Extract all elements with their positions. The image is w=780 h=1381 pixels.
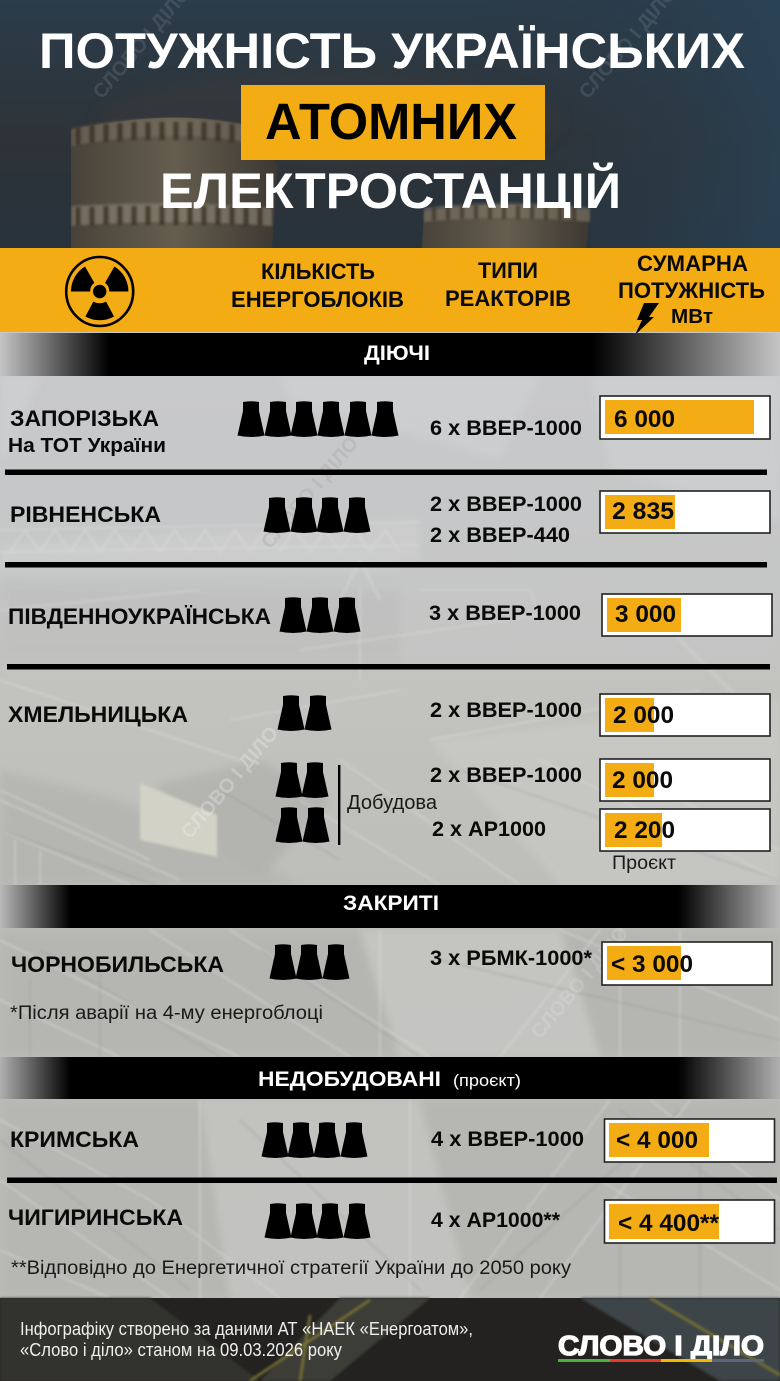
capacity bar: 3000: 3 000 bbox=[615, 601, 676, 628]
row: Pivdennoukrainska bbox=[8, 594, 772, 636]
background: plant site photo bbox=[0, 376, 780, 1298]
plant building bbox=[140, 783, 217, 857]
station name: ЗАПОРІЗЬКА bbox=[10, 406, 159, 431]
section band: unfinished: НЕДОБУДОВАНІ bbox=[258, 1068, 441, 1091]
icon: 6 cooling towers bbox=[238, 401, 398, 437]
column heading: reactor types: РЕАКТОРІВ bbox=[445, 286, 571, 311]
capacity bar: 2000 bbox=[600, 694, 770, 736]
reactor types bbox=[430, 493, 582, 547]
column heading: reactor types bbox=[445, 258, 571, 311]
row: Rivnenska bbox=[10, 491, 770, 547]
reactor types: 2 x ВВЕР-440 bbox=[430, 524, 570, 547]
column heading: total capacity: МВт bbox=[671, 306, 713, 328]
station name: РІВНЕНСЬКА bbox=[10, 502, 161, 527]
title highlight box bbox=[241, 85, 545, 160]
title bbox=[39, 23, 745, 219]
source text bbox=[20, 1319, 473, 1360]
title: ПОТУЖНІСТЬ УКРАЇНСЬКИХ bbox=[39, 23, 745, 79]
row: Chyhyrynska bbox=[8, 1200, 774, 1279]
column heading: units: КІЛЬКІСТЬ bbox=[261, 259, 375, 284]
capacity bar: 6000: 6 000 bbox=[614, 406, 675, 433]
capacity bar: under 4000: < 4 000 bbox=[616, 1127, 698, 1154]
title highlight box: АТОМНИХ bbox=[265, 93, 517, 150]
station name: КРИМСЬКА bbox=[10, 1127, 139, 1152]
capacity bar: under 3000 bbox=[602, 942, 772, 985]
reactor types: 3 x РБМК-1000* bbox=[430, 947, 593, 970]
icon: radiation symbol bbox=[66, 257, 133, 326]
icon: 2 planned towers bbox=[276, 807, 330, 843]
column heading: units: ЕНЕРГОБЛОКІВ bbox=[231, 287, 404, 312]
column heading: reactor types: ТИПИ bbox=[478, 258, 538, 283]
station name bbox=[8, 406, 166, 457]
title: ЕЛЕКТРОСТАНЦІЙ bbox=[160, 162, 621, 219]
station name: ПІВДЕННОУКРАЇНСЬКА bbox=[8, 604, 271, 629]
reactor types: 3 x ВВЕР-1000 bbox=[429, 602, 581, 625]
capacity bar: under 3000: < 3 000 bbox=[611, 951, 693, 978]
reactor types: 2 x ВВЕР-1000 bbox=[430, 493, 582, 516]
footer bbox=[0, 1298, 780, 1381]
reactor types: 6 x ВВЕР-1000 bbox=[430, 417, 582, 440]
icon: 4 cooling towers bbox=[262, 1122, 368, 1158]
logo: Slovo i Dilo: СЛОВО І ДІЛО bbox=[558, 1330, 764, 1361]
capacity bar: 2000 completion bbox=[600, 759, 770, 801]
section band: operating bbox=[0, 333, 780, 376]
reactor types: 2 x ВВЕР-1000 bbox=[430, 699, 582, 722]
background: cooling towers photo bbox=[0, 0, 780, 248]
label: completion: Добудова bbox=[347, 792, 438, 814]
capacity bar: 2000 completion: 2 000 bbox=[612, 767, 673, 794]
row: Khmelnytska bbox=[8, 694, 770, 874]
background: plant site photo: СЛОВО І ДІЛО bbox=[527, 923, 633, 1043]
reactor types: 4 x АР1000** bbox=[431, 1209, 561, 1232]
source text: Інфографіку створено за даними АТ «НАЕК «Енергоатом», bbox=[20, 1319, 473, 1339]
column heading: total capacity bbox=[618, 251, 765, 328]
icon: 3 cooling towers bbox=[270, 944, 350, 980]
capacity bar: 2835: 2 835 bbox=[612, 498, 674, 525]
station name: ЧИГИРИНСЬКА bbox=[8, 1205, 183, 1230]
background: plant site photo: СЛОВО І ДІЛО bbox=[257, 433, 363, 553]
section band: unfinished bbox=[0, 1057, 780, 1099]
section band: closed bbox=[0, 885, 780, 928]
source text: «Слово і діло» станом на 09.03.2026 року bbox=[20, 1340, 342, 1360]
row: Krymska bbox=[10, 1119, 774, 1162]
icon: 4 cooling towers bbox=[264, 497, 370, 533]
footnote: energy strategy: **Відповідно до Енергетичної стратегії України до 2050 року bbox=[11, 1258, 572, 1279]
icon: 2 towers under construction bbox=[276, 762, 328, 798]
capacity bar: 2835 bbox=[600, 491, 770, 533]
icon: 2 cooling towers bbox=[278, 695, 332, 731]
capacity bar: 2000: 2 000 bbox=[613, 702, 674, 729]
reactor types: 4 x ВВЕР-1000 bbox=[431, 1128, 584, 1151]
capacity bar: under 4000 bbox=[604, 1119, 774, 1162]
capacity bar: 2200 bbox=[600, 809, 770, 851]
capacity bar: 2200: 2 200 bbox=[614, 817, 675, 844]
capacity bar: 3000 bbox=[602, 594, 772, 636]
station name: ЧОРНОБИЛЬСЬКА bbox=[11, 952, 224, 977]
background: plant site photo: СЛОВО І ДІЛО bbox=[177, 723, 283, 843]
column heading: total capacity: ПОТУЖНІСТЬ bbox=[618, 278, 765, 303]
capacity bar: under 4400 bbox=[604, 1200, 774, 1243]
section band: closed: ЗАКРИТІ bbox=[343, 892, 439, 915]
section band: operating: ДІЮЧІ bbox=[364, 342, 430, 365]
station name: На ТОТ України bbox=[8, 435, 166, 457]
icon: 4 cooling towers bbox=[264, 1203, 370, 1239]
column heading: units bbox=[231, 259, 404, 312]
capacity bar: 6000 bbox=[600, 396, 770, 439]
column heading: total capacity: СУМАРНА bbox=[637, 251, 748, 276]
reactor types: completion: 2 x ВВЕР-1000 bbox=[430, 764, 582, 787]
capacity bar: under 4400: < 4 400** bbox=[618, 1210, 720, 1237]
section band: unfinished: (проєкт) bbox=[453, 1071, 521, 1090]
row: Chornobylska bbox=[10, 942, 772, 1024]
footnote: Chornobyl: *Після аварії на 4-му енергоблоці bbox=[10, 1003, 323, 1024]
icon: lightning bolt bbox=[635, 303, 659, 335]
header panel bbox=[0, 248, 780, 335]
reactor types: AP1000: 2 x АР1000 bbox=[432, 818, 546, 841]
row: Zaporizka bbox=[8, 396, 770, 457]
icon: 3 cooling towers bbox=[280, 597, 360, 633]
label: project: Проєкт bbox=[612, 853, 676, 874]
station name: ХМЕЛЬНИЦЬКА bbox=[8, 702, 188, 727]
